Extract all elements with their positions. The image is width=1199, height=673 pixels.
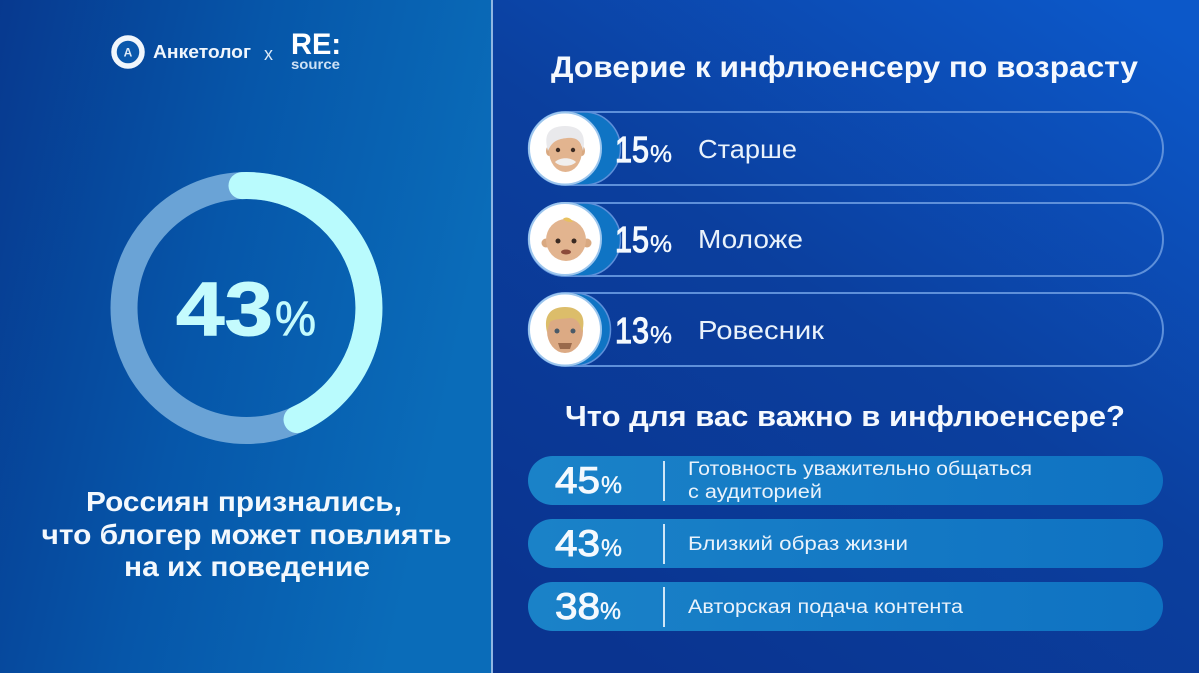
bar: 45% [528,456,1163,505]
value: % [650,141,672,168]
value: 15 [615,129,649,170]
row: Старше 15% [529,112,1163,185]
label: Моложе [698,224,803,254]
text: left caption [42,486,452,582]
value: % [601,472,622,499]
value: 38 [555,586,600,627]
text: left caption: на их поведение [124,551,370,582]
progress cap [528,293,611,366]
text: x: x [264,44,273,64]
progress cap [529,112,620,185]
value: 13 [615,310,649,351]
panel: right background [493,0,1199,673]
text: Анкетолог: Анкетолог [153,42,252,62]
icon: adult man emoji [546,307,583,353]
bar: 38% [528,582,1163,631]
label: с аудиторией [688,482,822,503]
icon: baby emoji [542,218,592,261]
row: Моложе 15% [528,203,1163,276]
donut value: 43 [176,267,273,352]
value [555,460,622,501]
icon: Анкетолог logo [114,38,142,66]
label: Авторская подача контента [688,597,963,618]
heading: trust by age: Доверие к инфлюенсеру по возрасту [551,51,1138,84]
donut chart: 43% [124,186,369,430]
value: 15 [615,219,649,260]
value: % [650,322,672,349]
value: 43 [555,523,600,564]
value: 45 [555,460,600,501]
value: % [601,535,622,562]
label: Старше [698,134,797,164]
label: Ровесник [698,315,825,345]
panel: left background [0,0,492,673]
text: source: source [291,56,340,72]
text: left caption: что блогер может повлиять [42,519,452,550]
text: left caption: Россиян признались, [86,486,402,517]
value [555,523,622,564]
donut value: % [275,293,316,346]
donut value [176,267,316,352]
icon: elderly man emoji [546,126,585,172]
heading: what matters: Что для вас важно в инфлюенсере? [565,401,1125,433]
label: Близкий образ жизни [688,534,908,555]
logos: Анкетолог x RE:source [114,28,341,72]
text: RE:: RE: [291,28,341,61]
icon: Анкетолог logo: А [124,46,133,60]
label: Готовность уважительно общаться [688,459,1032,480]
value: % [650,231,672,258]
value: % [600,598,621,625]
bar: 43% [528,519,1163,568]
row: Ровесник 13% [528,293,1163,366]
value [555,586,621,627]
label [688,459,1032,503]
progress cap [528,203,620,276]
